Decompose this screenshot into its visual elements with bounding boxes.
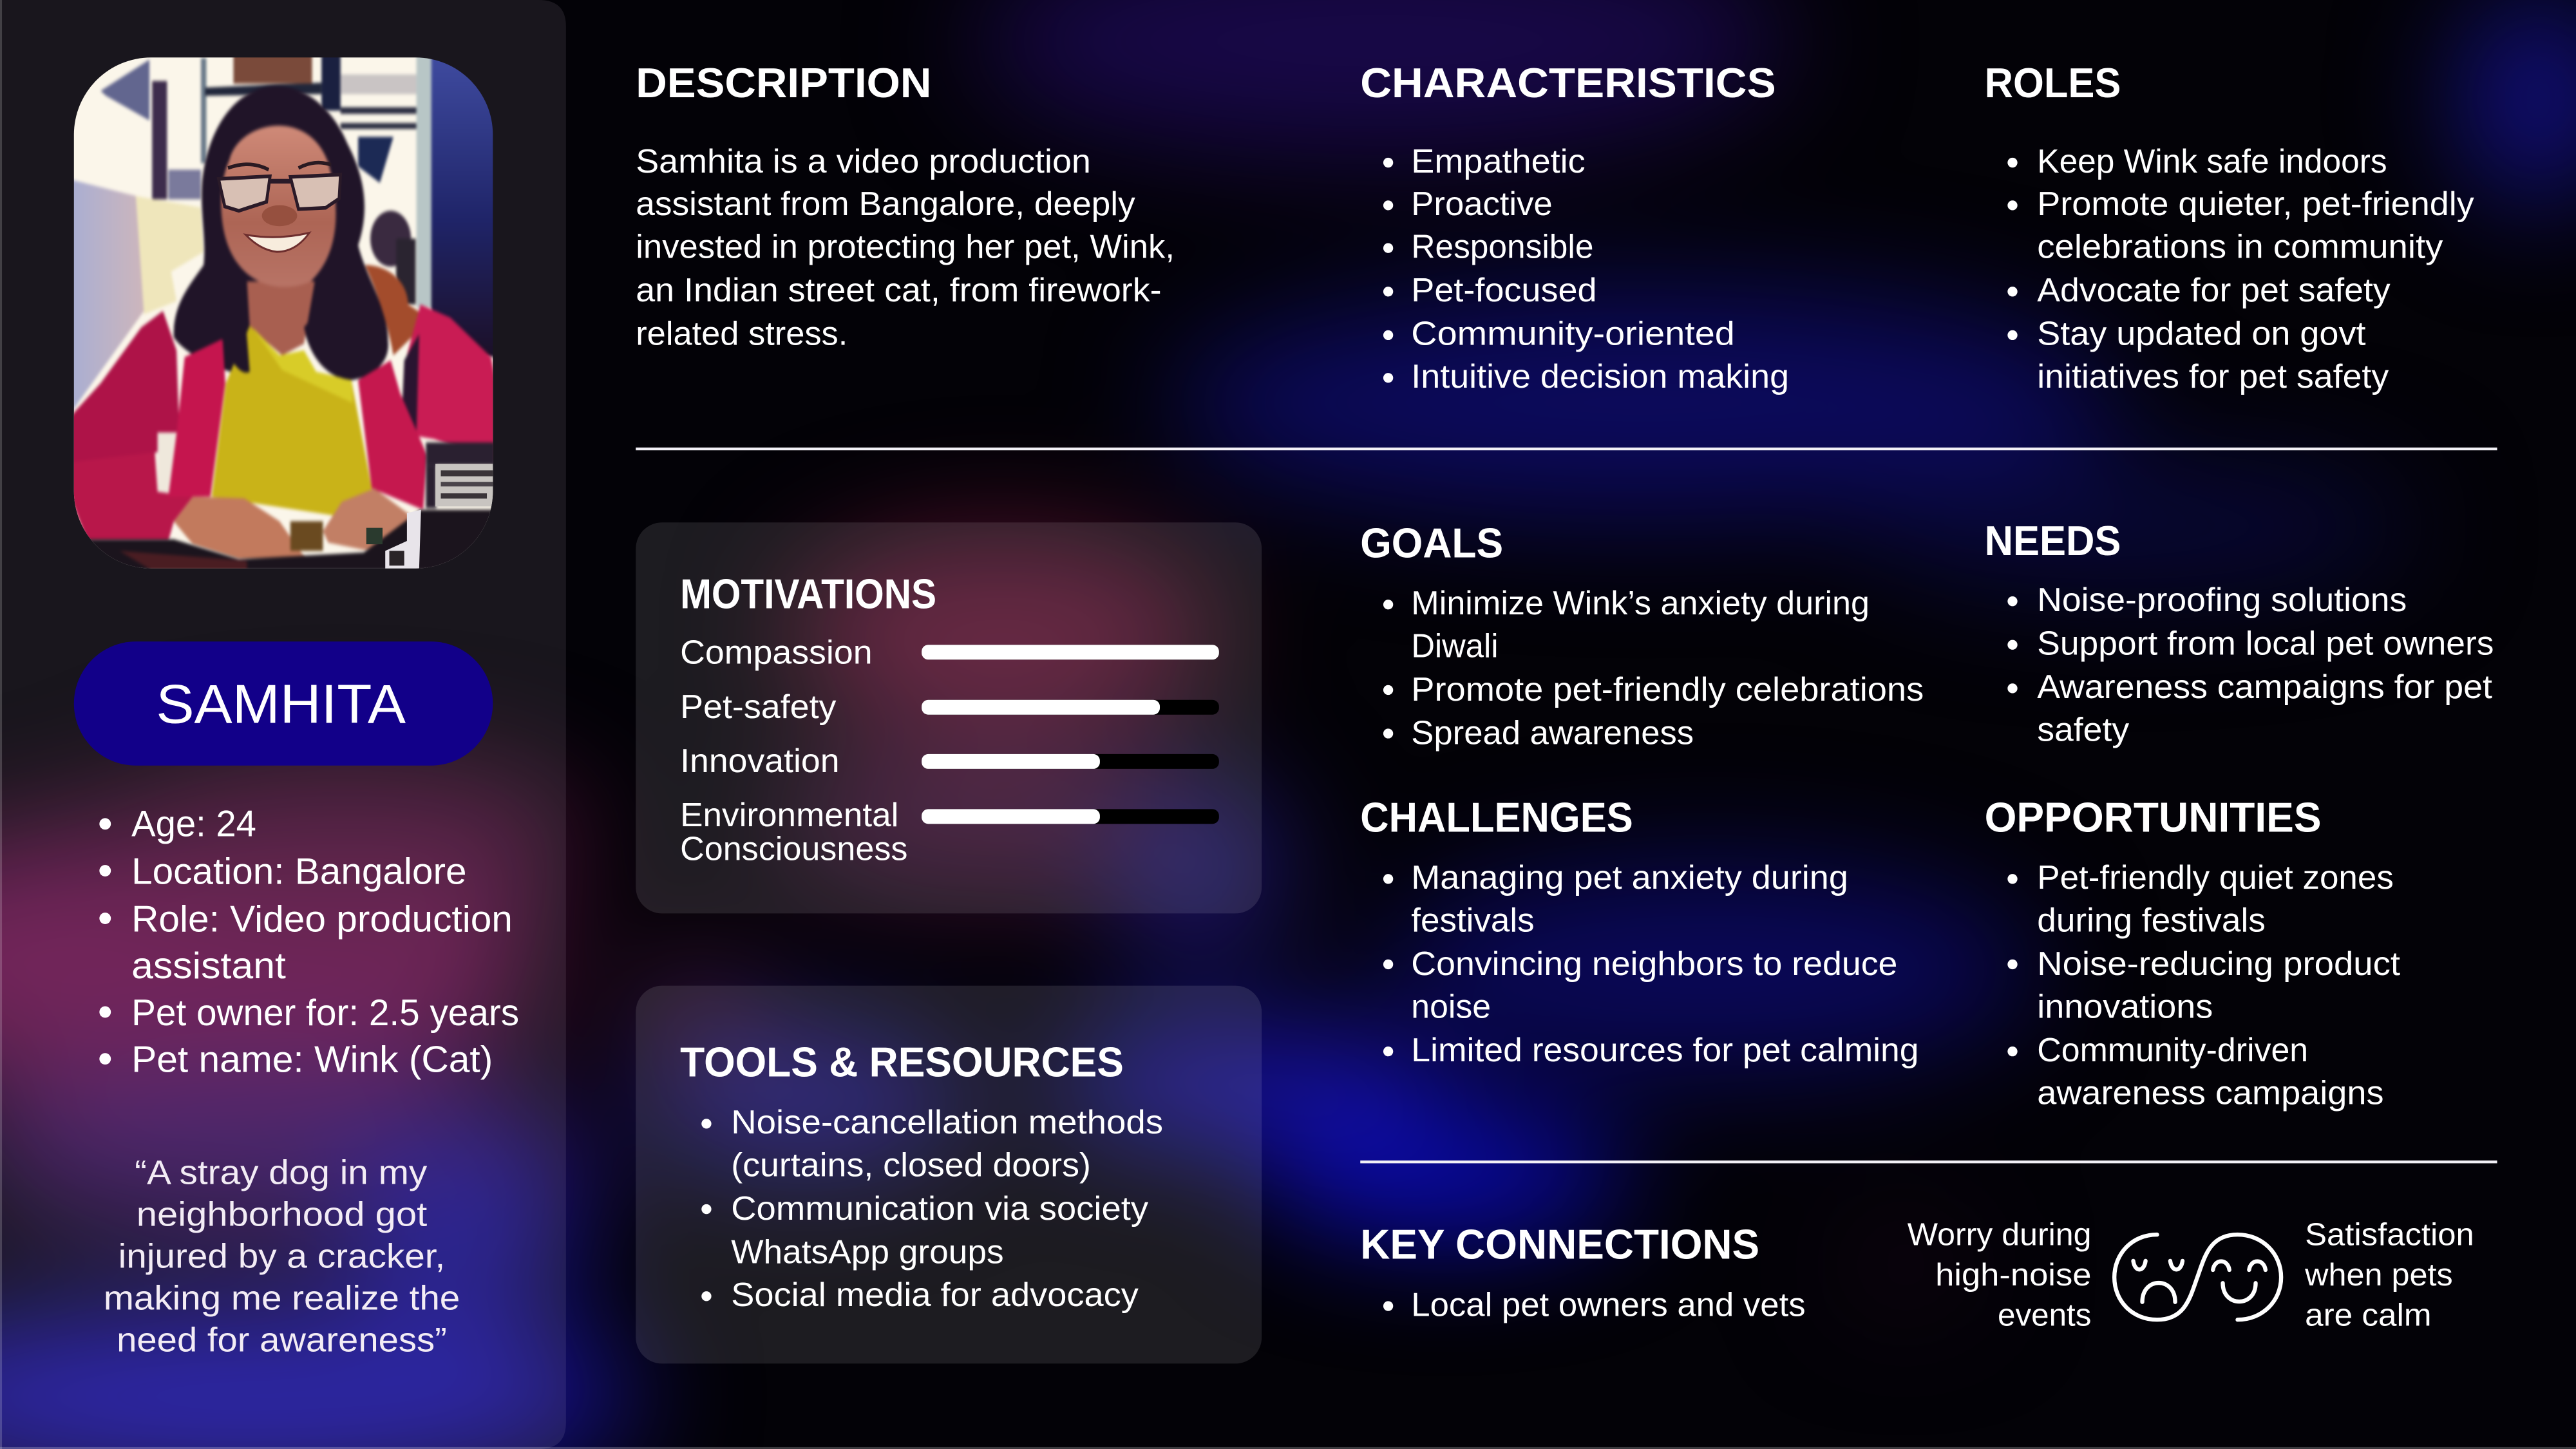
right sleeve — [406, 305, 497, 462]
description section: related stress. — [636, 315, 848, 352]
needs section: Support from local pet owners — [2037, 625, 2494, 662]
neck — [247, 281, 315, 355]
bar: environmental consciousness — [680, 796, 1219, 867]
profile facts list: Pet name: Wink (Cat) — [131, 1039, 493, 1081]
face — [221, 126, 336, 287]
bar: environmental consciousness: Environmental — [680, 796, 898, 833]
bar: innovation: Innovation — [680, 742, 840, 779]
challenges section: Limited resources for pet calming — [1411, 1031, 1919, 1068]
characteristics section: Community-oriented — [1411, 315, 1735, 352]
profile facts list — [99, 803, 519, 1081]
opportunities section: Noise-reducing product — [2037, 945, 2400, 982]
worry label: events — [1998, 1298, 2091, 1333]
roles section: Promote quieter, pet-friendly — [2037, 185, 2474, 222]
QR sticker — [435, 464, 497, 506]
goals section: Minimize Wink’s anxiety during — [1411, 584, 1870, 621]
satisfaction label: are calm — [2305, 1298, 2432, 1333]
needs section: Awareness campaigns for pet — [2037, 668, 2492, 705]
opportunities section: during festivals — [2037, 901, 2266, 938]
goals section: GOALS — [1360, 519, 1503, 566]
characteristics section: Proactive — [1411, 185, 1553, 222]
needs section: Noise-proofing solutions — [2037, 581, 2407, 618]
panel: tools and resources: (curtains, closed doors) — [731, 1146, 1091, 1184]
hair — [174, 86, 388, 380]
bar: innovation — [680, 742, 1219, 779]
cup — [366, 510, 421, 569]
bar: environmental consciousness: Consciousness — [680, 829, 907, 867]
roles section: initiatives for pet safety — [2037, 357, 2389, 395]
characteristics section: Intuitive decision making — [1411, 357, 1789, 395]
profile facts list: Role: Video production — [131, 898, 513, 940]
bar: compassion — [680, 634, 1219, 671]
quote: making me realize the — [104, 1280, 460, 1318]
panel: tools and resources — [636, 986, 1262, 1363]
roles section: Stay updated on govt — [2037, 315, 2365, 352]
key connections section: Local pet owners and vets — [1411, 1285, 1806, 1323]
quote: need for awareness” — [117, 1321, 447, 1359]
characteristics section: Empathetic — [1411, 142, 1586, 180]
name badge: SAMHITA — [156, 674, 406, 735]
worry label: high-noise — [1935, 1257, 2091, 1293]
portrait photo — [71, 55, 497, 571]
opportunities section: Community-driven — [2037, 1031, 2308, 1068]
bar: pet-safety — [680, 688, 1219, 725]
characteristics section: CHARACTERISTICS — [1360, 59, 1776, 106]
profile facts list: Age: 24 — [131, 803, 256, 844]
opportunities section: awareness campaigns — [2037, 1074, 2384, 1111]
icon: sad and happy faces — [2114, 1235, 2281, 1320]
roles section: celebrations in community — [2037, 228, 2443, 265]
worry label — [1908, 1217, 2091, 1333]
characteristics section: Pet-focused — [1411, 271, 1597, 308]
hair front locks — [206, 305, 250, 373]
challenges section: Convincing neighbors to reduce — [1411, 945, 1897, 982]
key connections section: KEY CONNECTIONS — [1360, 1221, 1759, 1268]
roles section — [1985, 59, 2474, 395]
panel: profile sidebar — [0, 0, 566, 1449]
goals section: Spread awareness — [1411, 714, 1694, 752]
goals section: Diwali — [1411, 627, 1499, 664]
bar: pet-safety: Pet-safety — [680, 688, 837, 725]
panel: tools and resources: Social media for advocacy — [731, 1276, 1139, 1313]
quote: neighborhood got — [137, 1196, 428, 1234]
satisfaction label — [2304, 1217, 2474, 1333]
challenges section: CHALLENGES — [1360, 793, 1633, 840]
panel: tools and resources: WhatsApp groups — [731, 1233, 1004, 1271]
needs section: safety — [2037, 711, 2129, 748]
characteristics section — [1360, 59, 1789, 395]
needs section: NEEDS — [1985, 517, 2121, 564]
panel: tools and resources: TOOLS & RESOURCES — [680, 1038, 1124, 1085]
table and dark base — [71, 510, 497, 571]
challenges section: Managing pet anxiety during — [1411, 858, 1848, 896]
needs section — [1985, 517, 2494, 748]
description section: Samhita is a video production — [636, 142, 1091, 180]
name badge — [74, 641, 493, 766]
bar: compassion: Compassion — [680, 634, 873, 671]
roles section: ROLES — [1985, 59, 2121, 106]
worry label: Worry during — [1908, 1217, 2091, 1253]
satisfaction label: Satisfaction — [2305, 1217, 2474, 1253]
panel: tools and resources: Communication via society — [731, 1189, 1148, 1227]
panel: motivations — [636, 522, 1262, 913]
floral scarf — [365, 265, 421, 355]
roles section: Advocate for pet safety — [2037, 271, 2391, 308]
key connections section — [1360, 1221, 1806, 1323]
characteristics section: Responsible — [1411, 228, 1593, 265]
opportunities section: innovations — [2037, 987, 2213, 1025]
left sleeve — [71, 311, 179, 466]
opportunities section — [1985, 793, 2400, 1111]
description section: assistant from Bangalore, deeply — [636, 185, 1135, 222]
panel: tools and resources: Noise-cancellation methods — [731, 1103, 1163, 1141]
description section: DESCRIPTION — [636, 59, 931, 106]
profile facts list: Location: Bangalore — [131, 851, 466, 892]
roles section: Keep Wink safe indoors — [2037, 142, 2387, 180]
satisfaction label: when pets — [2304, 1257, 2453, 1293]
profile facts list: Pet owner for: 2.5 years — [131, 992, 519, 1034]
opportunities section: Pet-friendly quiet zones — [2037, 858, 2394, 896]
challenges section: noise — [1411, 987, 1491, 1025]
quote: injured by a cracker, — [118, 1238, 445, 1276]
challenges section: festivals — [1411, 901, 1535, 938]
description section — [636, 59, 1175, 352]
hands — [174, 497, 308, 562]
top — [212, 326, 372, 521]
opportunities section: OPPORTUNITIES — [1985, 793, 2322, 840]
quote — [104, 1154, 460, 1359]
description section: an Indian street cat, from firework- — [636, 271, 1162, 308]
panel: motivations: MOTIVATIONS — [680, 570, 936, 617]
description section: invested in protecting her pet, Wink, — [636, 228, 1175, 265]
goals section: Promote pet-friendly celebrations — [1411, 670, 1924, 708]
profile facts list: assistant — [131, 945, 286, 987]
challenges section — [1360, 793, 1919, 1068]
goals section — [1360, 519, 1924, 752]
quote: “A stray dog in my — [135, 1154, 428, 1192]
